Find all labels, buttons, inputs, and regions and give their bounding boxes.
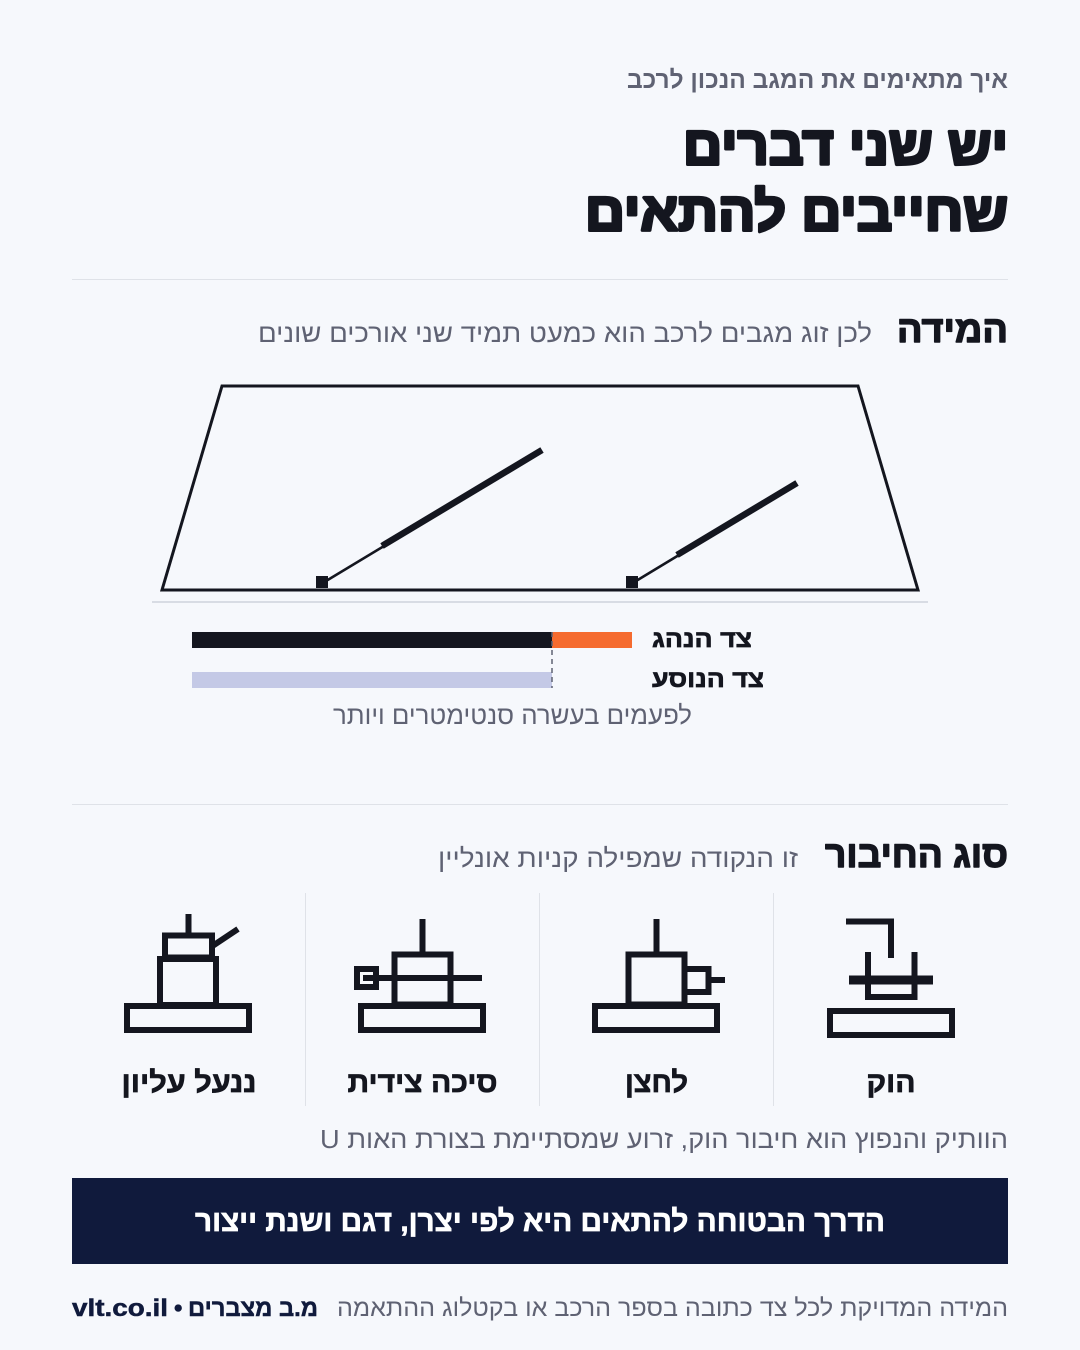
- callout banner: [72, 1178, 1008, 1264]
- difference caption: לפעמים בעשרה סנטימטרים ויותר: [333, 700, 692, 730]
- section: measurement: [152, 309, 1008, 730]
- icon: side pin: [357, 919, 483, 1030]
- passenger wiper: [626, 483, 797, 588]
- passenger side bar: [192, 672, 552, 688]
- windshield outline: [162, 386, 918, 590]
- section subheading: connection type: זו הנקודה שמפילה קניות אונליין: [438, 843, 799, 873]
- footer: [72, 1295, 1008, 1322]
- section heading: measurement: המידה: [897, 309, 1008, 350]
- title: שחייבים להתאים: [585, 182, 1008, 242]
- diagram: windshield with wipers: [162, 386, 918, 590]
- icon: hook: [830, 922, 952, 1035]
- driver wiper: [316, 450, 542, 588]
- icon: push button: [595, 919, 725, 1030]
- driver side label: צד הנהג: [652, 626, 752, 653]
- chart: blade length comparison: [192, 626, 764, 730]
- header: [585, 66, 1008, 242]
- footer brand: [72, 1295, 318, 1322]
- footer note: המידה המדויקת לכל צד כתובה בספר הרכב או בקטלוג ההתאמה: [337, 1295, 1008, 1322]
- icon: top lock: [127, 914, 249, 1030]
- note: most common connector: הוותיק והנפוץ הוא חיבור הוק, זרוע שמסתיימת בצורת האות U: [320, 1124, 1008, 1154]
- comparison dashed marker: [551, 632, 553, 688]
- connector card: top lock: [122, 914, 256, 1099]
- connector card: hook: [830, 922, 952, 1099]
- footer brand: מ.ב מצברים: [188, 1295, 318, 1322]
- connector card: side pin: [348, 919, 498, 1099]
- label: hook: הוק: [866, 1067, 916, 1099]
- footer brand: •: [174, 1295, 182, 1322]
- section: connection type: [122, 834, 1008, 1154]
- footer brand: vlt.co.il: [72, 1295, 168, 1322]
- title: [585, 116, 1008, 242]
- label: side pin: סיכה צידית: [348, 1067, 498, 1099]
- callout banner: הדרך הבטוחה להתאים היא לפי יצרן, דגם ושנת ייצור: [195, 1205, 885, 1238]
- section heading: connection type: סוג החיבור: [825, 834, 1008, 875]
- section subheading: measurement: לכן זוג מגבים לרכב הוא כמעט תמיד שני אורכים שונים: [258, 318, 872, 348]
- passenger side label: צד הנוסע: [652, 666, 764, 693]
- eyebrow: איך מתאימים את המגב הנכון לרכב: [627, 66, 1008, 94]
- label: push button: לחצן: [625, 1067, 688, 1099]
- connector card: push button: [595, 919, 725, 1099]
- label: top lock: ננעל עליון: [122, 1067, 256, 1099]
- title: יש שני דברים: [683, 116, 1008, 176]
- driver side bar: [192, 632, 632, 648]
